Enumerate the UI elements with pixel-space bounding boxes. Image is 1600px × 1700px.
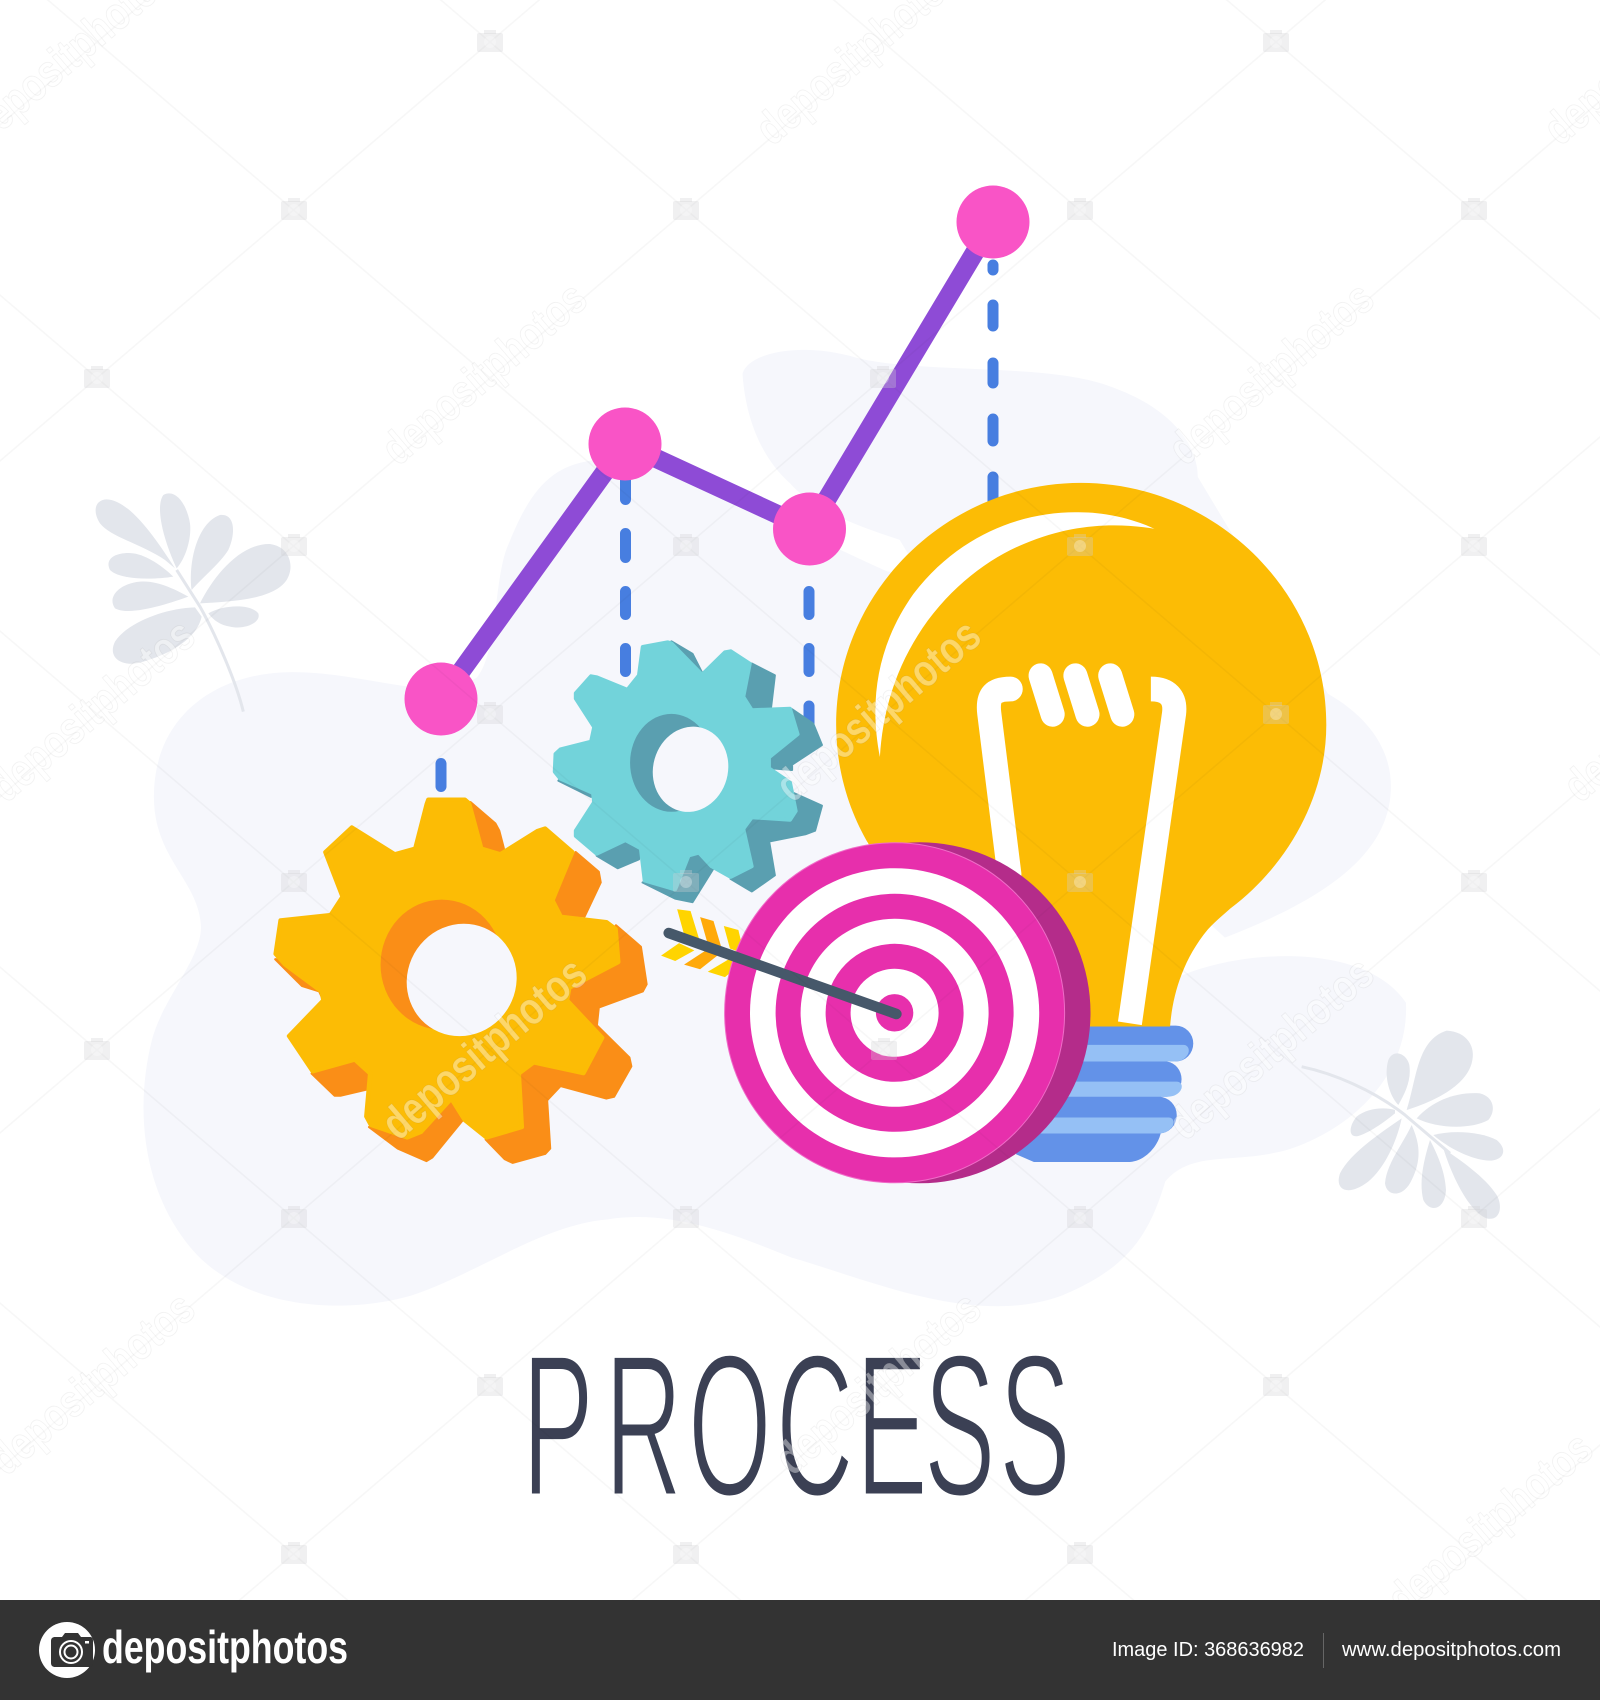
chart points [404,186,1030,736]
chart line [441,222,993,699]
watermark text: depositphotos [1158,271,1383,474]
image id: Image ID: 368636982 [1112,1639,1304,1661]
logo wordmark: depositphotos [102,1621,348,1673]
title: PROCESS [522,1313,1071,1539]
background blobs [144,350,1406,1306]
highlight [875,512,1154,757]
watermark text: depositphotos [371,271,596,474]
icon: depositphotos camera logo [39,1622,95,1678]
icon: light bulb [836,483,1326,1162]
icon: gold gear [275,800,647,1163]
watermark text: depositphotos [371,946,596,1149]
watermark text: depositphotos [765,608,990,811]
bulb glass [836,483,1326,1027]
footer bar [0,1600,1600,1700]
dashed drop lines [441,265,993,786]
icon: teal gear [555,641,822,902]
icon: right leaf [1302,1031,1503,1219]
icon: arrow shaft [669,933,896,1014]
filament [989,676,1174,1023]
watermark text: depositphotos [765,1281,990,1484]
icon: target [725,842,1090,1183]
website url: www.depositphotos.com [1341,1639,1561,1661]
watermark text: depositphotos [1158,946,1383,1149]
icon: left leaf [96,493,291,712]
icon: arrow fletching [661,909,744,977]
bulb base [1007,1026,1193,1162]
line chart [404,186,1030,736]
watermark cameras [84,30,1487,1564]
